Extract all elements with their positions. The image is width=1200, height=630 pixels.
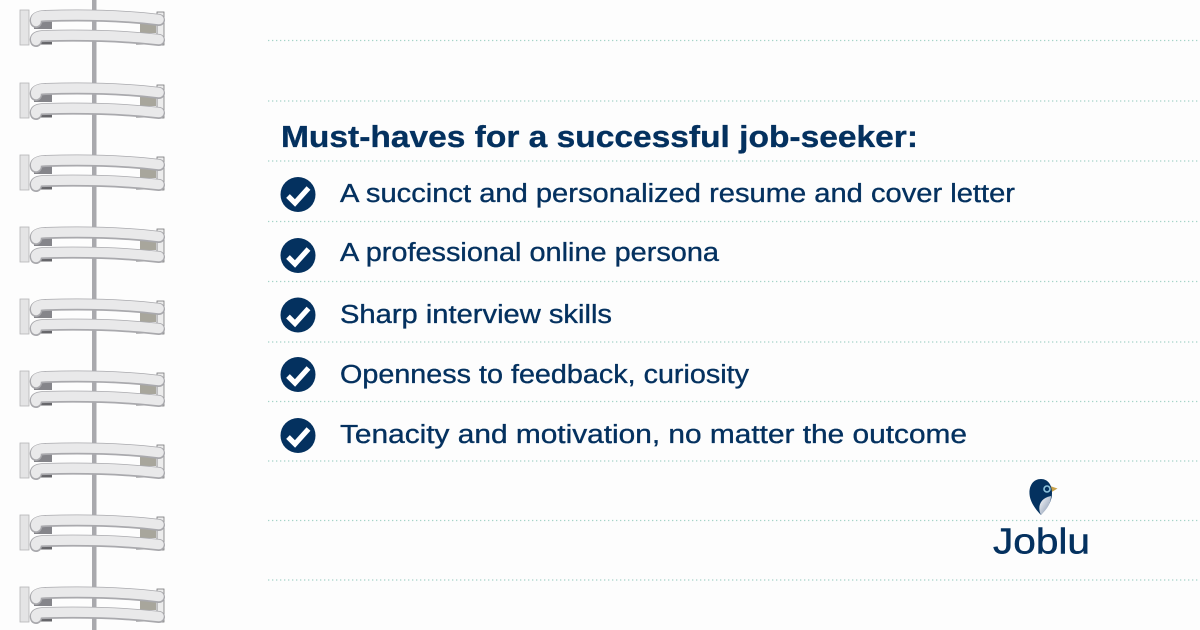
- ring 1: [20, 10, 164, 45]
- icon: check: [280, 298, 316, 332]
- icon: bird: [1029, 479, 1058, 515]
- item: resume and cover letter: A succinct and personalized resume and cover letter: [340, 180, 1016, 208]
- item: openness: Openness to feedback, curiosity: [340, 361, 749, 389]
- item: resume and cover letter: [280, 177, 1016, 212]
- item: interview skills: [280, 298, 612, 332]
- spiral binding: [20, 0, 164, 630]
- ring 8: [20, 515, 164, 550]
- ring 2: [20, 83, 164, 118]
- ruled lines: [268, 40, 1200, 580]
- checklist: [280, 177, 1016, 453]
- item: tenacity: [280, 418, 967, 453]
- item: tenacity: Tenacity and motivation, no matter the outcome: [340, 421, 967, 449]
- ring 6: [20, 371, 164, 406]
- icon: check: [280, 177, 316, 212]
- item: openness: [280, 357, 749, 392]
- item: online persona: A professional online persona: [340, 239, 720, 267]
- ring 9: [20, 587, 164, 622]
- ring 5: [20, 299, 164, 334]
- icon: check: [280, 238, 316, 273]
- icon: check: [280, 357, 316, 392]
- ring 7: [20, 443, 164, 478]
- item: online persona: [280, 238, 720, 273]
- item: interview skills: Sharp interview skills: [340, 301, 612, 329]
- Joblu logo: [993, 479, 1090, 562]
- icon: check: [280, 418, 316, 453]
- binding spine wire: [92, 0, 96, 630]
- heading: Must-haves for a successful job-seeker:: [281, 119, 918, 154]
- wordmark: Joblu: [993, 520, 1090, 562]
- ring 3: [20, 155, 164, 190]
- ring 4: [20, 227, 164, 262]
